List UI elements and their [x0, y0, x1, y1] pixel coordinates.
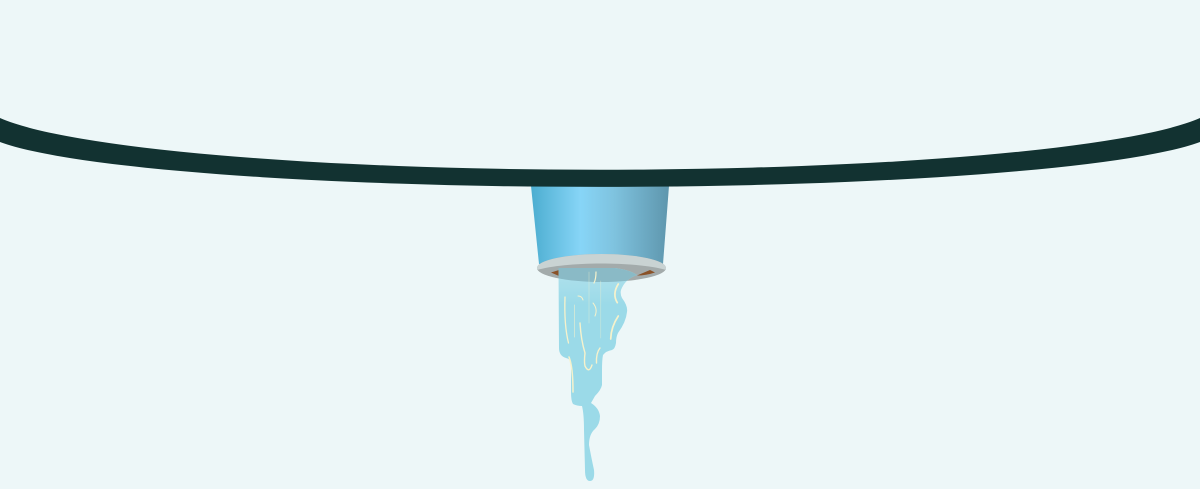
- curved pipe: [0, 118, 1200, 187]
- spout rim: [537, 254, 666, 282]
- illustration: pipe with leaking spout: [0, 118, 1200, 481]
- rust spot left: [551, 270, 559, 276]
- water stream: [558, 268, 637, 481]
- water over rim: [558, 268, 637, 282]
- water highlights: [565, 272, 618, 392]
- rust spot right: [637, 270, 655, 276]
- spout body: [531, 186, 669, 264]
